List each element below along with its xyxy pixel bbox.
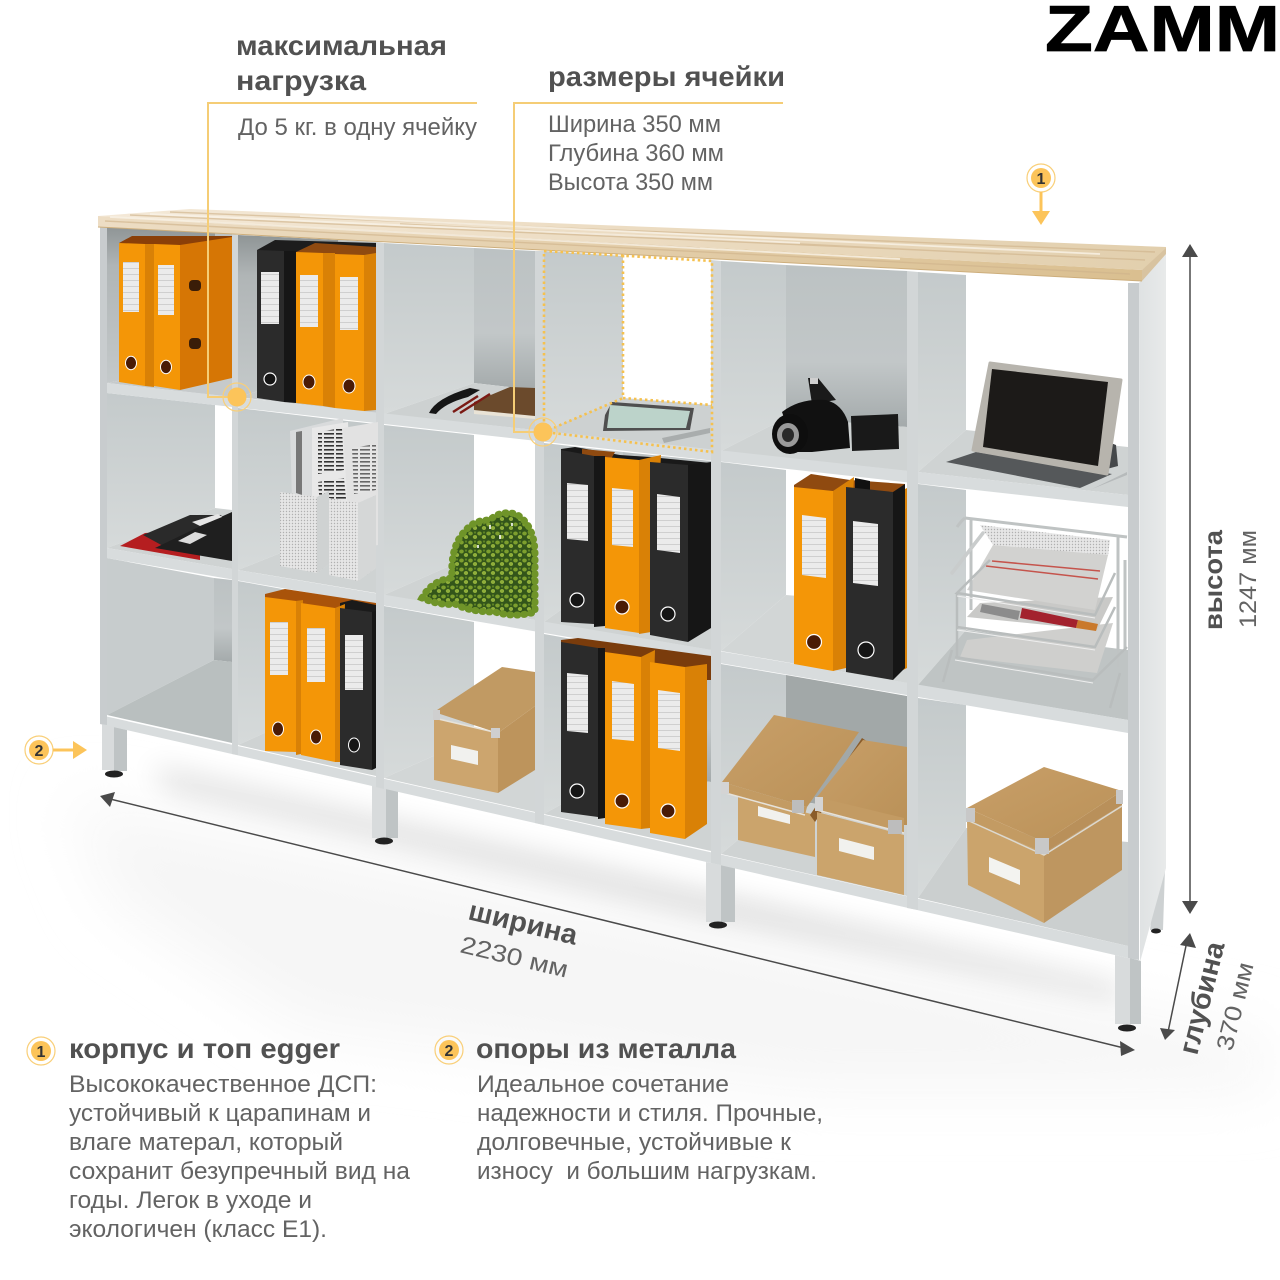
feature 1: body and top: Высококачественное ДСП: bbox=[69, 1071, 377, 1098]
feature 1: body and top: экологичен (класс Е1). bbox=[69, 1216, 327, 1243]
cardboard box row 3 column 6 bbox=[966, 767, 1123, 923]
callout: cell size: размеры ячейки bbox=[548, 61, 785, 92]
feature 1: body and top: устойчивый к царапинам и bbox=[69, 1100, 371, 1127]
wood top bbox=[98, 209, 1166, 281]
marker 1 with arrow: 1 bbox=[1037, 171, 1046, 188]
depth dimension bbox=[1160, 933, 1260, 1057]
desk items: watch, pens and notebook bbox=[429, 387, 535, 419]
tablet on highlighted shelf bbox=[603, 402, 710, 443]
callout: maximum load: нагрузка bbox=[236, 65, 366, 96]
camera bbox=[772, 378, 899, 454]
marker 2 with arrow: 2 bbox=[35, 743, 44, 760]
feature 1: body and top: сохранит безупречный вид на bbox=[69, 1158, 411, 1185]
depth dimension: 370 мм bbox=[1212, 960, 1260, 1053]
feature 2: metal legs: 2 bbox=[445, 1043, 454, 1060]
feature 2: metal legs: долговечные, устойчивые к bbox=[477, 1129, 792, 1156]
feature 1: body and top: корпус и топ egger bbox=[69, 1033, 340, 1064]
callout: cell size: Высота 350 мм bbox=[548, 169, 713, 196]
feature 1: body and top: 1 bbox=[37, 1044, 46, 1061]
callout: cell size: Ширина 350 мм bbox=[548, 111, 721, 138]
floor shadow bbox=[70, 765, 1270, 1090]
feature 2: metal legs bbox=[435, 1033, 823, 1185]
wire document tray bbox=[943, 518, 1127, 708]
binders cell row 2 column 4 bbox=[561, 447, 711, 642]
feature 2: metal legs: надежности и стиля. Прочные, bbox=[477, 1100, 823, 1127]
height dimension: 1247 мм bbox=[1235, 530, 1262, 628]
marker 1 with arrow bbox=[1027, 164, 1055, 225]
callout: maximum load: максимальная bbox=[236, 30, 447, 61]
callout: cell size: Глубина 360 мм bbox=[548, 140, 724, 167]
magazines bbox=[120, 512, 232, 561]
binders cell row 3 column 4 bbox=[561, 638, 711, 839]
feature 1: body and top: влаге матерал, который bbox=[69, 1129, 343, 1156]
feature 2: metal legs: Идеальное сочетание bbox=[477, 1071, 729, 1098]
height dimension: высота bbox=[1198, 529, 1228, 630]
feature 1: body and top bbox=[27, 1033, 411, 1243]
callout: maximum load bbox=[208, 30, 477, 411]
depth dimension: глубина bbox=[1173, 938, 1231, 1057]
feature 2: metal legs: опоры из металла bbox=[476, 1033, 736, 1064]
height dimension bbox=[1182, 244, 1262, 914]
cardboard boxes row 3 column 5 bbox=[721, 715, 907, 895]
dotted highlight of one cell bbox=[544, 251, 712, 452]
binders cell row 3 column 2 bbox=[265, 589, 376, 770]
binders top left cell bbox=[119, 236, 232, 390]
feature 2: metal legs: износу и большим нагрузкам. bbox=[477, 1158, 817, 1185]
shelving legs bbox=[102, 724, 1165, 1032]
binders cell row 2 column 5 bbox=[794, 474, 907, 680]
width dimension: 2230 мм bbox=[458, 932, 571, 984]
marker 2 with arrow bbox=[25, 736, 87, 764]
width dimension bbox=[100, 792, 1135, 1056]
width dimension: ширина bbox=[466, 895, 581, 951]
shelf and divider front edges bbox=[100, 227, 1166, 962]
callout: cell size bbox=[514, 61, 785, 446]
feature 1: body and top: годы. Легок в уходе и bbox=[69, 1187, 312, 1214]
cardboard box row 3 column 3 bbox=[433, 667, 535, 793]
plant bbox=[422, 513, 535, 615]
binders cell row 1 column 2 bbox=[257, 240, 376, 411]
paper holders bbox=[280, 418, 378, 581]
tablet with keyboard bbox=[946, 363, 1127, 490]
callout: maximum load: До 5 кг. в одну ячейку bbox=[238, 114, 477, 141]
shelving unit cells bbox=[107, 227, 1128, 946]
